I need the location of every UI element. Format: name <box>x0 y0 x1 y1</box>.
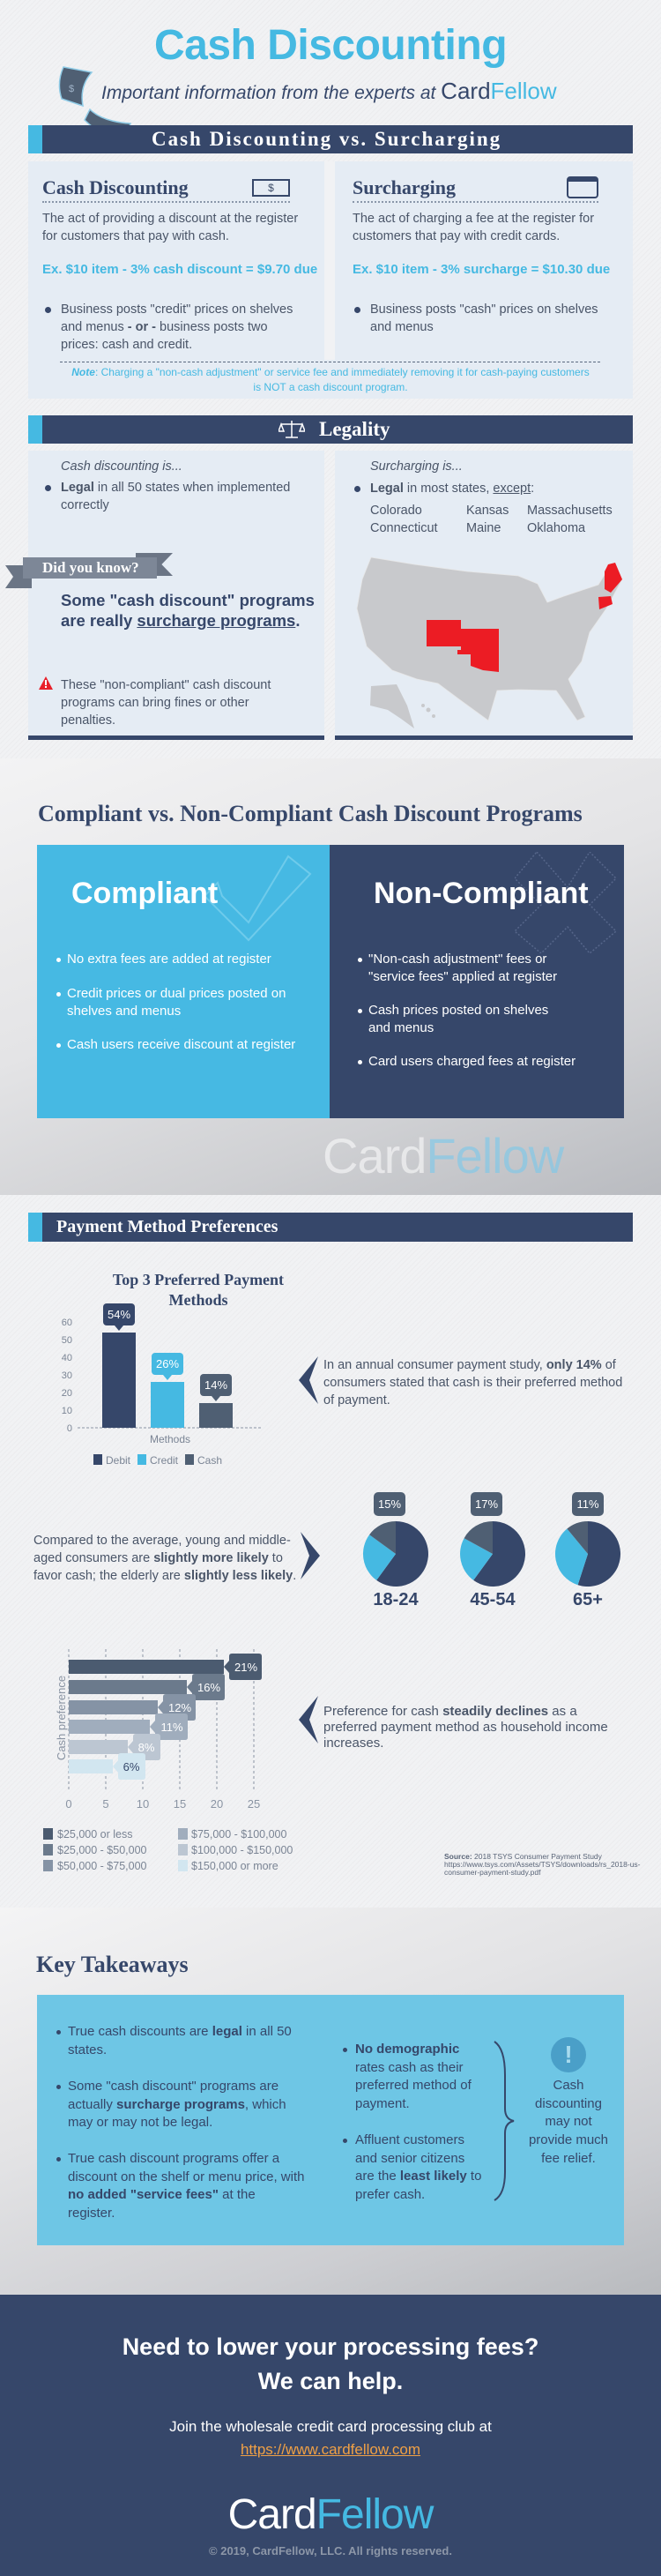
icon: falling money <box>58 66 131 137</box>
bar chart: cash preference by income: $25,000 - $50,000 <box>57 1844 147 1856</box>
panel: compliant <box>37 845 330 1118</box>
bar chart: top 3 payment methods: 10 <box>62 1406 72 1416</box>
background: takeaways photo <box>0 1908 661 2296</box>
icon: check watermark <box>206 855 312 942</box>
panel: key takeaways <box>37 1995 624 2245</box>
bar chart: cash preference by income: 21% <box>234 1661 257 1674</box>
bullet: Business posts "cash" prices on shelves and menus <box>370 302 598 334</box>
title: Cash Discounting <box>154 22 507 69</box>
header: cash discounting vs surcharging: Cash Discounting vs. Surcharging <box>152 128 501 150</box>
map: US states <box>356 557 622 728</box>
bar chart: cash preference by income: Cash preference <box>55 1676 68 1760</box>
panel: cash discounting legality <box>28 451 324 740</box>
panel: non-compliant <box>330 845 624 1118</box>
background: card photo area <box>0 758 661 1195</box>
copyright: © 2019, CardFellow, LLC. All rights reserved. <box>209 2544 452 2557</box>
pie: 18-24: 15% <box>378 1497 401 1511</box>
states list: Oklahoma <box>527 521 585 535</box>
pie: 65+: 65+ <box>573 1590 603 1609</box>
right bullets <box>343 2042 481 2202</box>
text: income decline: Preference for cash steadily declines as a preferred payment method as household income increases. <box>323 1704 608 1751</box>
text: age comparison: Compared to the average, young and middle-aged consumers are slightly more likely to favor cash; the elderly are slightly less likely. <box>33 1534 296 1583</box>
pie: 65+: 11% <box>576 1497 599 1511</box>
panel: cash discounting <box>42 176 317 352</box>
description: The act of providing a discount at the register for customers that pay with cash. <box>42 212 298 243</box>
heading: key takeaways: Key Takeaways <box>36 1952 189 1977</box>
panel: non-compliant: "Non-cash adjustment" fees or "service fees" applied at register <box>368 952 557 984</box>
bar chart: top 3 payment methods: 54% <box>108 1308 130 1321</box>
icon: warning <box>39 676 53 690</box>
bar chart: top 3 payment methods: 60 <box>62 1318 72 1328</box>
icon: exclamation <box>551 2037 586 2072</box>
panel: key takeaways: Some "cash discount" programs are actually surcharge programs, which may or may not be legal. <box>68 2079 286 2130</box>
bar chart: cash preference by income: 12% <box>168 1701 191 1714</box>
example: Ex. $10 item - 3% surcharge = $10.30 due <box>353 262 610 277</box>
bar chart: top 3 payment methods: Methods <box>169 1291 227 1309</box>
bar chart: top 3 payment methods: 30 <box>62 1370 72 1381</box>
left bullets <box>56 2024 304 2221</box>
panel: key takeaways: True cash discounts are legal in all 50 states. <box>68 2024 292 2057</box>
bullet: legal: Legal in all 50 states when implemented correctly <box>61 481 290 512</box>
bar chart: cash preference by income: 16% <box>197 1681 220 1694</box>
header: payment method preferences: Payment Method Preferences <box>56 1217 278 1236</box>
states list <box>370 504 613 535</box>
example: Ex. $10 item - 3% cash discount = $9.70 due <box>42 262 317 277</box>
states list: Maine <box>466 521 501 535</box>
bar chart: cash preference by income: 6% <box>123 1760 140 1773</box>
bar chart: cash preference by income: 10 <box>137 1797 149 1811</box>
states list: Colorado <box>370 504 422 518</box>
bar chart: top 3 payment methods: 14% <box>204 1378 227 1392</box>
bar chart: top 3 payment methods: 26% <box>156 1357 179 1370</box>
pie: 45-54 <box>460 1492 525 1609</box>
pie charts: age groups <box>363 1492 620 1609</box>
header: legality: Legality <box>319 418 390 440</box>
callout: fee relief: Cash discounting may not provide much fee relief. <box>529 2078 608 2166</box>
note: Note: Charging a "non-cash adjustment" or service fee and immediately removing it for cash-paying customers is NOT a cash discount program. <box>71 366 590 393</box>
intro: Cash discounting is... <box>61 459 182 474</box>
arrow: right chevron <box>301 1532 320 1579</box>
logo: CardFellow <box>228 2491 433 2538</box>
bullet: legal except: Legal in most states, except: <box>370 482 534 496</box>
source: Source: 2018 TSYS Consumer Payment Study https://www.tsys.com/Assets/TSYS/downloads/rs_2018-us-consumer-payment-study.pdf <box>444 1852 641 1877</box>
panel: surcharging <box>353 176 610 334</box>
states list: Kansas <box>466 504 509 518</box>
icon: falling money: $ <box>69 84 74 94</box>
bullet: Business posts "credit" prices on shelves and menus - or - business posts two prices: cash and credit. <box>61 302 293 352</box>
subtitle: Important information from the experts at CardFellow <box>101 78 557 104</box>
panel: key takeaways: No demographic rates cash as their preferred method of payment. <box>355 2042 472 2111</box>
bar chart: cash preference by income <box>43 1649 293 1872</box>
bar chart: cash preference by income: $75,000 - $100,000 <box>191 1828 286 1841</box>
arrow: left chevron <box>299 1356 318 1404</box>
bar chart: top 3 payment methods: 50 <box>62 1335 72 1346</box>
panel: compliant: No extra fees are added at register <box>67 952 271 967</box>
bar chart: cash preference by income: $100,000 - $150,000 <box>191 1844 293 1856</box>
bar chart: cash preference by income: $25,000 or less <box>57 1828 132 1841</box>
footer text: Join the wholesale credit card processing club at <box>169 2418 492 2435</box>
footer heading: Need to lower your processing fees? <box>123 2333 538 2360</box>
footer <box>0 2295 661 2576</box>
panel: non-compliant: Cash prices posted on shelves and menus <box>368 1003 548 1035</box>
bar chart: top 3 payment methods: 20 <box>62 1388 72 1399</box>
panel: compliant: Cash users receive discount at register <box>67 1037 295 1052</box>
footer heading <box>123 2333 538 2394</box>
callout: surcharge programs: Some "cash discount" programs are really surcharge programs. <box>61 591 315 630</box>
header: legality <box>28 415 633 444</box>
icon: bill: $ <box>268 182 274 194</box>
pie: 18-24: 18-24 <box>373 1590 419 1609</box>
bar chart: cash preference by income: 20 <box>211 1797 223 1811</box>
panel: key takeaways: True cash discount programs offer a discount on the shelf or menu price, with no added "service fees" at the register. <box>68 2151 304 2221</box>
icon: X watermark <box>515 852 616 953</box>
heading: cash discounting: Cash Discounting <box>42 176 189 198</box>
header: payment method preferences <box>28 1213 633 1242</box>
panel: surcharging legality <box>335 451 633 740</box>
bar chart: top 3 payment methods: Cash <box>197 1454 222 1467</box>
footer heading: We can help. <box>258 2368 403 2394</box>
bar chart: cash preference by income: 8% <box>138 1741 155 1754</box>
footer text: https://www.cardfellow.com <box>241 2441 420 2458</box>
bullets: compliant <box>56 952 295 1052</box>
panel: comparison <box>28 161 633 399</box>
bar chart: cash preference by income: 15 <box>174 1797 186 1811</box>
panel: non-compliant: Card users charged fees at register <box>368 1054 576 1069</box>
intro: Surcharging is... <box>370 459 463 474</box>
heading: surcharging: Surcharging <box>353 176 456 198</box>
pie: 45-54: 45-54 <box>470 1590 516 1609</box>
bar chart: top 3 payment methods: Top 3 Preferred Payment <box>113 1271 284 1288</box>
states list: Massachusetts <box>527 504 613 518</box>
icon: scales <box>279 421 305 438</box>
heading: compliant: Compliant <box>71 877 218 910</box>
bar chart: cash preference by income: 5 <box>102 1797 109 1811</box>
states list: Connecticut <box>370 521 438 535</box>
bar chart: top 3 payment methods <box>62 1271 284 1467</box>
did you know ribbon <box>5 553 173 588</box>
bar chart: top 3 payment methods: 0 <box>67 1423 72 1434</box>
bar chart: cash preference by income: 25 <box>248 1797 260 1811</box>
warning text: These "non-compliant" cash discount programs can bring fines or other penalties. <box>61 678 271 728</box>
bar chart: top 3 payment methods: 40 <box>62 1353 72 1363</box>
bar chart: cash preference by income: $150,000 or more <box>191 1860 279 1872</box>
arrow: left chevron income <box>299 1696 318 1743</box>
did you know ribbon: Did you know? <box>42 559 139 576</box>
panel: key takeaways: Affluent customers and senior citizens are the least likely to prefer cash. <box>355 2132 481 2202</box>
bar chart: cash preference by income: 11% <box>160 1721 183 1734</box>
icon: bill <box>252 179 290 197</box>
description: The act of charging a fee at the register for customers that pay with credit cards. <box>353 212 594 243</box>
header: cash discounting vs surcharging <box>28 125 633 153</box>
watermark logo: CardFellow <box>323 1128 563 1183</box>
bar chart: cash preference by income: $50,000 - $75,000 <box>57 1860 147 1872</box>
panel: compliant: Credit prices or dual prices posted on shelves and menus <box>67 986 286 1018</box>
bullets: non-compliant <box>358 952 576 1069</box>
bar chart: top 3 payment methods: Credit <box>150 1454 179 1467</box>
pie: 18-24 <box>363 1492 428 1609</box>
heading: compliant vs non-compliant: Compliant vs. Non-Compliant Cash Discount Programs <box>38 801 583 826</box>
footer text <box>169 2418 492 2458</box>
bar chart: top 3 payment methods: Methods <box>150 1433 190 1445</box>
pie: 65+ <box>555 1492 620 1609</box>
pie: 45-54: 17% <box>475 1497 498 1511</box>
bar chart: top 3 payment methods: Debit <box>106 1454 131 1467</box>
heading: non-compliant: Non-Compliant <box>374 877 589 910</box>
icon: card <box>567 176 598 198</box>
brace <box>494 2041 515 2201</box>
icon: exclamation: ! <box>564 2041 573 2068</box>
icon: falling money: $ <box>104 126 109 137</box>
bar chart: cash preference by income: 0 <box>65 1797 72 1811</box>
text: 14% study: In an annual consumer payment study, only 14% of consumers stated that cash is their preferred method of payment. <box>323 1358 622 1407</box>
